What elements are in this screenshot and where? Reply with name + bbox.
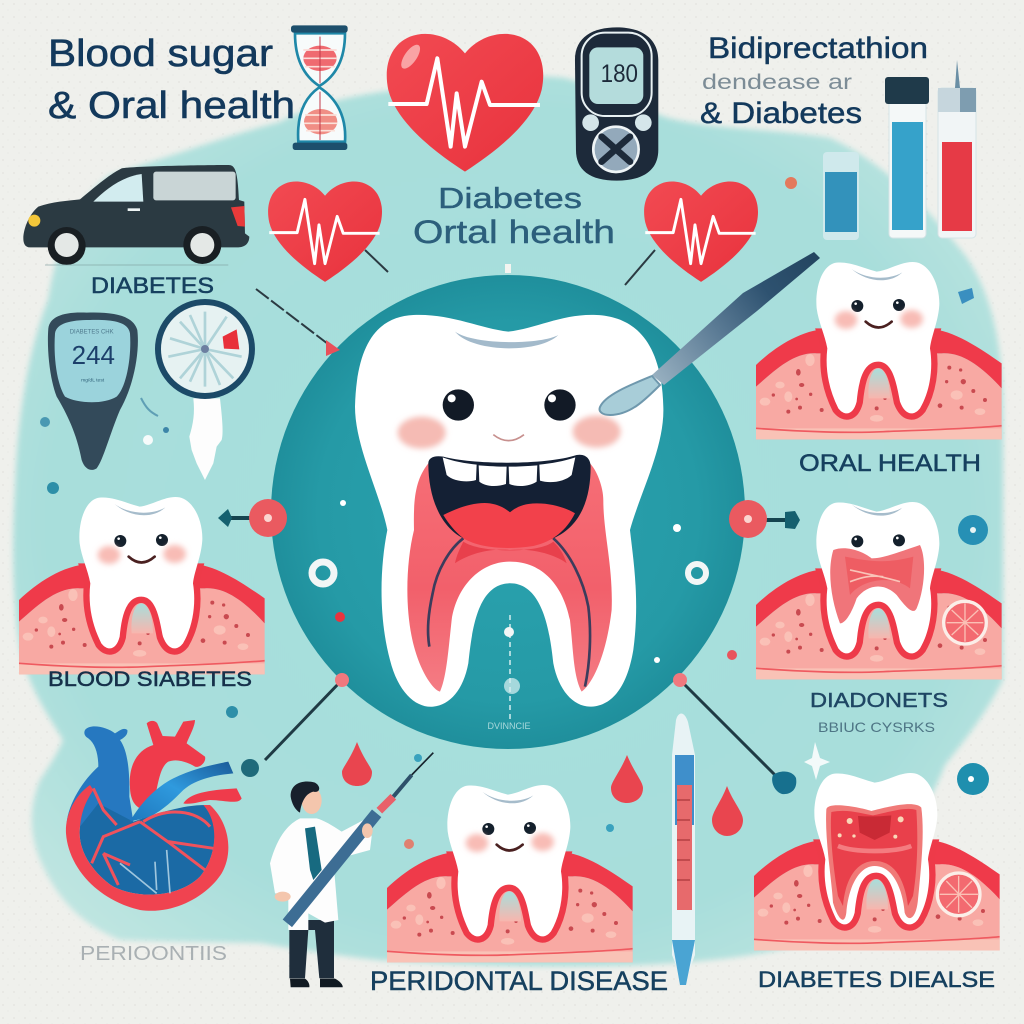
title: right heading: dendease ar [702,71,852,94]
head [302,787,322,814]
tooth body [355,315,663,707]
label: diadonets [810,690,948,735]
label: diadonets: DIADONETS [810,690,948,712]
icon: test tubes [823,60,976,240]
panel: right bottom decayed tooth [754,773,1000,950]
shoes [290,979,343,987]
icon: glucose meter left: mg/dL test [81,377,105,383]
label: diabetes: DIABETES [91,273,214,298]
icon: small heart right [644,182,758,282]
panel: bottom centre tooth [387,785,633,962]
inflamed band [455,542,567,563]
trousers [289,920,334,978]
upper teeth [443,457,575,486]
tie [305,827,322,880]
panel: central circle [271,275,745,749]
pink root interior [407,463,612,692]
connector: upper left arrow [256,289,340,356]
tongue [443,503,575,548]
icon: large heart [387,34,543,172]
icon: dental mirror tool [600,252,820,415]
small decorative accents [40,177,989,849]
panel: left tooth [19,497,265,674]
connector: centre right node [729,500,800,538]
cheeks [398,417,446,449]
connector: lower right arrow [673,673,796,794]
icon: doctor with instrument [270,753,433,987]
icon: anatomical heart [66,720,242,911]
connector: upper heart arrows [365,250,655,285]
panel: top right tooth [756,262,1002,439]
icon: glucose meter left [48,313,138,470]
label: diabetes dielase: DIABETES DIEALSE [758,967,995,992]
panel: right middle decayed tooth [756,502,1002,679]
label: peridontal disease: PERIDONTAL DISEASE [370,966,668,996]
icon: hourglass [291,25,348,150]
label: oral health: ORAL HEALTH [799,450,981,477]
title: blood sugar and oral health: Blood sugar [48,33,273,75]
icon: syringe thermometer [672,714,695,985]
icon: small heart left [268,182,382,282]
icon: gauge with feather [158,302,252,480]
connector: centre left node [218,499,287,537]
title: right heading: Bidiprectathion [708,32,928,65]
heading: diabetes oral health [413,183,615,250]
white coat [270,818,372,930]
nerve lines [428,538,590,687]
title: right heading: & Diabetes [700,97,862,130]
icon: glucose meter top: 180 [601,61,638,88]
label: blood siabetes: BLOOD SIABETES [48,668,252,691]
hand [275,892,291,902]
connector: lower left arrow [241,673,349,777]
label: perioontiis: PERIOONTIIS [80,943,227,965]
label: small centre caption: DVINNCIE [487,721,531,731]
title: blood sugar and oral health [48,33,295,127]
icon: blood drops [342,742,743,836]
icon: glucose meter top [575,27,658,181]
instrument [287,813,377,923]
main tooth character [355,315,663,707]
icon: glucose meter left: DIABETES CHK [70,329,114,335]
open mouth [428,455,591,546]
crown highlight [455,332,558,348]
title: right heading [700,32,928,130]
heading: diabetes oral health: Diabetes [438,183,582,215]
icon: van [23,165,249,265]
heading: diabetes oral health: Ortal health [413,214,615,250]
eyes [443,389,474,421]
label: diadonets: BBIUC CYSRKS [818,719,935,735]
smile [493,435,524,441]
title: blood sugar and oral health: & Oral health [48,85,295,127]
small rings and dots in circle [312,500,737,720]
icon: glucose meter left: 244 [72,340,115,370]
